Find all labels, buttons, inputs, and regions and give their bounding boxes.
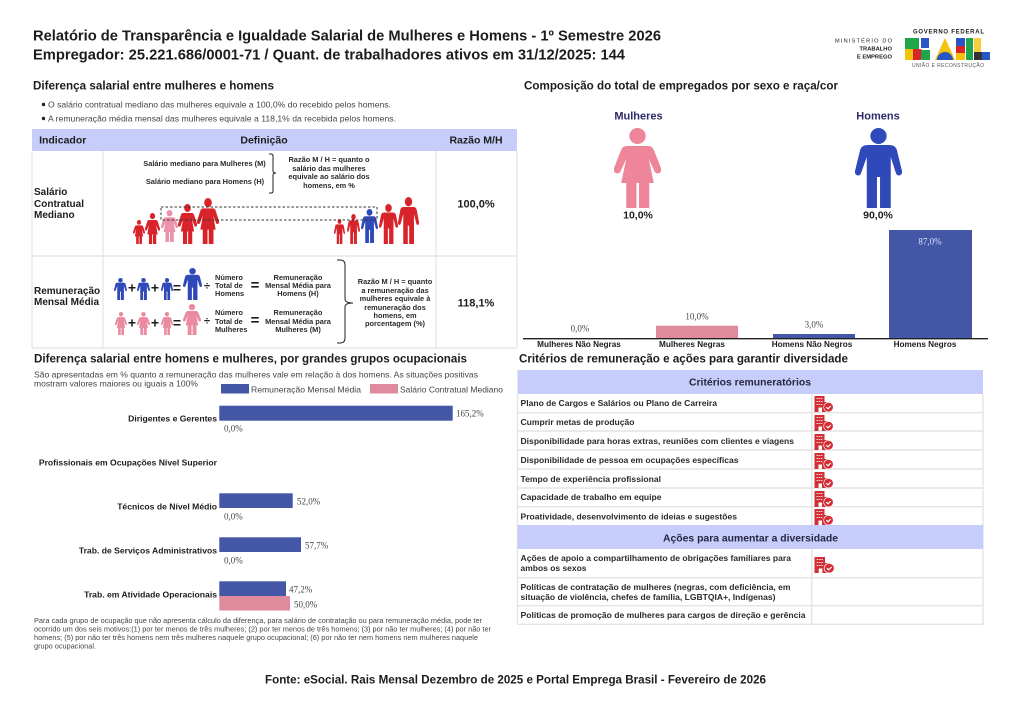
icon: women formula: =: [173, 315, 181, 331]
bar chart: sex and race composition: Mulheres Não Negras: [537, 340, 621, 349]
row: remuneração mensal média: Remuneração: [274, 308, 323, 317]
icons: criteria checks: [814, 396, 833, 525]
row: salário contratual mediano: homens, em %: [303, 181, 355, 190]
legend: Remuneração Mensal Média: [251, 384, 361, 394]
bar chart: occupational groups: 50,0%: [294, 600, 318, 610]
panel: mulheres share: 10,0%: [623, 210, 654, 222]
row: salário contratual mediano: 100,0%: [457, 199, 495, 211]
row: remuneração mensal média: homens, em: [373, 311, 417, 320]
row: salário contratual mediano: equivale ao salário dos: [288, 172, 370, 181]
table header: Indicador: [39, 135, 86, 147]
bar chart: occupational groups: Trab. em Atividade Operacionais: [84, 590, 217, 600]
panel: criteria table: situação de violência, chefes de família, LGBTQIA+, Indígenas): [520, 593, 776, 602]
logo: ministério: TRABALHO: [859, 47, 892, 53]
text block: key findings: A remuneração média mensal das mulheres equivale a 118,1% da recebida pelos homens.: [48, 114, 396, 124]
panel: criteria table: Políticas de contratação de mulheres (negras, com deficiência, em: [520, 583, 790, 592]
bar chart: occupational groups: Profissionais em Ocupações Nível Superior: [39, 458, 218, 468]
footer source: Fonte: eSocial. Rais Mensal Dezembro de 2025 e Portal Emprega Brasil - Fevereiro de 2026: [265, 675, 766, 687]
bar chart: sex and race composition: 87,0%: [918, 237, 942, 247]
title: Empregador: 25.221.686/0001-71 / Quant. de trabalhadores ativos em 31/12/2025: 144: [33, 48, 625, 64]
logo: governo federal brasil: UNIÃO E RECONSTRUÇÃO: [912, 62, 984, 69]
row: remuneração mensal média: Homens: [215, 289, 244, 298]
panel: homens share: [855, 111, 902, 222]
bar chart: occupational groups: 57,7%: [305, 541, 329, 551]
panel: criteria table: [518, 370, 983, 624]
bar chart: sex and race composition: Homens Não Negros: [772, 340, 853, 349]
row: remuneração mensal média: Mensal Média: [34, 297, 99, 308]
row: remuneração mensal média: =: [251, 312, 260, 329]
logo: governo federal brasil: GOVERNO FEDERAL: [913, 30, 984, 36]
row: remuneração mensal média: Total de: [215, 281, 243, 290]
panel: indicator table: [32, 129, 517, 348]
row: remuneração mensal média: Número: [215, 273, 243, 282]
text block: footnote: grupo ocupacional.: [34, 644, 96, 651]
bar chart: occupational groups: 0,0%: [224, 556, 243, 566]
text block: chart intro: São apresentadas em % quanto a remuneração das mulheres vale em relação à dos homens. As situações positivas: [34, 370, 478, 380]
icon: women group: [133, 198, 219, 244]
icon: men formula: +: [128, 280, 136, 296]
bar chart: occupational groups: 52,0%: [297, 497, 321, 507]
logo: ministério: [835, 38, 893, 61]
logo: ministério: E EMPREGO: [857, 55, 892, 61]
row: salário contratual mediano: [34, 154, 495, 244]
panel: criteria table: ambos os sexos: [520, 564, 587, 573]
header: critérios remuneratórios: [518, 370, 983, 394]
panel: criteria table: Plano de Cargos e Salários ou Plano de Carreira: [520, 399, 718, 408]
icon: action check: [814, 557, 834, 573]
bar chart: sex and race composition: Homens Negros: [894, 340, 957, 349]
row: remuneração mensal média: [34, 260, 495, 343]
bar chart: occupational groups: Técnicos de Nível Médio: [117, 502, 217, 512]
row: remuneração mensal média: Remuneração: [274, 273, 323, 282]
row: remuneração mensal média: Homens (H): [277, 289, 319, 298]
text block: key findings: O salário contratual mediano das mulheres equivale a 100,0% do recebido pelos homens.: [48, 100, 391, 110]
text block: footnote: ocorrido um dos seis motivos:(1) por ter menos de três mulheres; (2) por ter menos de três homens; (3) por não ter mulheres; (4) por não ter: [34, 627, 492, 634]
logo: governo federal brasil: [905, 30, 990, 69]
text block: key findings: [42, 100, 396, 124]
row: remuneração mensal média: porcentagem (%): [365, 319, 426, 328]
row: remuneração mensal média: Mensal Média para: [265, 317, 332, 326]
bar chart: sex and race composition: 0,0%: [571, 324, 590, 334]
panel: criteria table: Políticas de promoção de mulheres para cargos de direção e gerência: [520, 611, 806, 620]
table header: [32, 129, 517, 151]
bar chart: occupational groups: Trab. de Serviços Administrativos: [79, 546, 217, 556]
row: remuneração mensal média: Total de: [215, 317, 243, 326]
title: [33, 29, 661, 64]
panel: mulheres share: [614, 111, 663, 222]
table header: Razão M/H: [449, 135, 503, 147]
icon: man: [855, 128, 902, 208]
bar chart: sex and race composition: 10,0%: [685, 312, 709, 322]
bar chart: sex and race composition: 3,0%: [805, 320, 824, 330]
panel: mulheres share: Mulheres: [614, 111, 663, 123]
row: remuneração mensal média: Mulheres: [215, 325, 247, 334]
heading: critérios: Critérios de remuneração e ações para garantir diversidade: [519, 354, 848, 366]
bar chart: occupational groups: [39, 406, 484, 610]
panel: homens share: Homens: [856, 111, 900, 123]
row: salário contratual mediano: Salário: [34, 187, 67, 198]
row: remuneração mensal média: 118,1%: [458, 298, 495, 310]
panel: criteria table: Disponibilidade de pessoa em ocupações específicas: [520, 456, 739, 465]
bar chart: occupational groups: 47,2%: [289, 585, 313, 595]
row: remuneração mensal média: Mulheres (M): [275, 325, 321, 334]
panel: criteria table: Tempo de experiência profissional: [520, 475, 661, 484]
row: salário contratual mediano: Razão M / H = quanto o: [288, 155, 370, 164]
bar chart: occupational groups: 0,0%: [224, 423, 243, 433]
title: Relatório de Transparência e Igualdade Salarial de Mulheres e Homens - 1º Semestre 2026: [33, 29, 661, 45]
row: remuneração mensal média: Número: [215, 308, 243, 317]
heading: diferença salarial: Diferença salarial entre mulheres e homens: [33, 81, 274, 93]
panel: criteria table: Capacidade de trabalho em equipe: [520, 493, 662, 502]
bar chart: sex and race composition: [523, 230, 988, 349]
row: salário contratual mediano: Salário mediano para Mulheres (M): [143, 159, 266, 168]
row: remuneração mensal média: Razão M / H = quanto: [358, 277, 433, 286]
header: critérios remuneratórios: Critérios remuneratórios: [689, 377, 811, 389]
icon: women formula: ÷: [204, 316, 210, 328]
logo: ministério: MINISTÉRIO DO: [835, 38, 893, 45]
panel: criteria table: Disponibilidade para horas extras, reuniões com clientes e viagens: [520, 437, 795, 446]
bar chart: occupational groups: Dirigentes e Gerentes: [128, 414, 217, 424]
table header: Definição: [240, 135, 288, 147]
bar chart: occupational groups: 165,2%: [456, 409, 484, 419]
icon: woman: [614, 128, 661, 208]
icon: women formula: +: [151, 315, 159, 331]
text block: footnote: [34, 618, 492, 651]
row: salário contratual mediano: salário das mulheres: [292, 164, 366, 173]
text block: footnote: Para cada grupo de ocupação que não apresenta cálculo da diferença, para salário de contratação ou para remuneração média, pode ter: [34, 618, 483, 625]
panel: homens share: 90,0%: [863, 210, 894, 222]
row: remuneração mensal média: =: [251, 277, 260, 294]
row: remuneração mensal média: Mensal Média para: [265, 281, 332, 290]
panel: criteria table: Cumprir metas de produção: [520, 418, 635, 427]
text block: chart intro: mostram valores maiores ou iguais a 100%: [34, 379, 198, 389]
bar chart: occupational groups: 0,0%: [224, 512, 243, 522]
icon: men formula: +: [151, 280, 159, 296]
panel: criteria table: Ações de apoio a compartilhamento de obrigações familiares para: [520, 554, 792, 563]
icon: men formula: =: [173, 280, 181, 296]
row: salário contratual mediano: Contratual: [34, 199, 84, 210]
row: remuneração mensal média: a remuneração das: [361, 286, 429, 295]
panel: criteria table: Proatividade, desenvolvimento de ideias e sugestões: [520, 512, 738, 521]
icon: men formula: ÷: [204, 281, 210, 293]
heading: grupos ocupacionais: Diferença salarial entre homens e mulheres, por grandes grupos ocupacionais: [34, 354, 467, 366]
icon: women formula: [115, 304, 210, 335]
row: remuneração mensal média: Remuneração: [34, 286, 100, 297]
row: remuneração mensal média: remuneração dos: [364, 303, 426, 312]
header: ações: [518, 525, 983, 549]
heading: composição: Composição do total de empregados por sexo e raça/cor: [524, 81, 839, 93]
row: remuneração mensal média: mulheres equivale à: [360, 294, 431, 303]
row: salário contratual mediano: Mediano: [34, 210, 75, 221]
legend: [221, 384, 503, 394]
icon: women formula: +: [128, 315, 136, 331]
icon: men formula: [114, 268, 210, 300]
bar chart: sex and race composition: Mulheres Negras: [659, 340, 725, 349]
legend: Salário Contratual Mediano: [400, 384, 503, 394]
text block: footnote: homens; (5) por não ter três homens nem três mulheres naquele grupo ocupacional; (6) por não ter nem homens nem mulheres naquele: [34, 635, 478, 642]
text block: chart intro: [34, 370, 478, 389]
row: salário contratual mediano: Salário mediano para Homens (H): [146, 177, 265, 186]
header: ações: Ações para aumentar a diversidade: [663, 532, 838, 544]
icon: men group: [334, 197, 419, 244]
